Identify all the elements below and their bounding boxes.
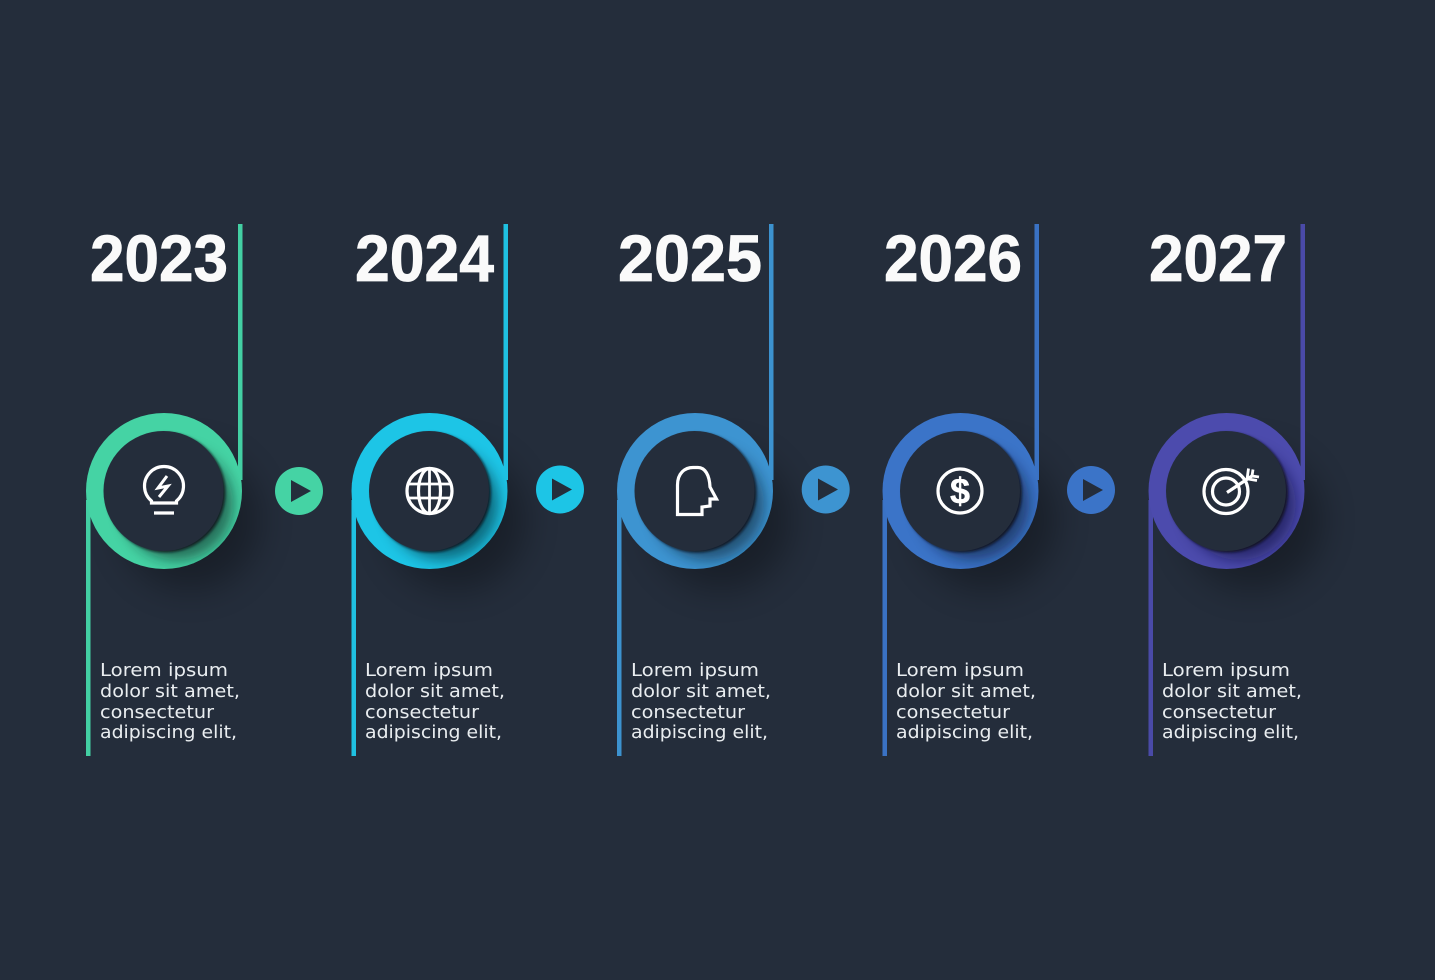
icon: head profile [678, 468, 716, 514]
disc [634, 431, 754, 551]
arrow 1 [275, 467, 323, 515]
text block: Lorem ipsum [365, 660, 493, 681]
text block: Lorem ipsum [896, 660, 1024, 681]
disc [369, 431, 489, 551]
icon: globe [407, 468, 452, 514]
icon: dollar coin [938, 469, 982, 513]
text block: Lorem ipsum [631, 660, 759, 681]
panel: 2025 [617, 221, 791, 756]
icon: dollar coin: $ [950, 470, 970, 512]
arrow 4 [1067, 466, 1115, 514]
text block: adipiscing elit, [100, 722, 237, 743]
text block: consectetur [365, 702, 480, 723]
text block: Lorem ipsum [100, 660, 228, 681]
ring [1148, 413, 1304, 569]
ring [352, 413, 508, 569]
text block [896, 660, 1036, 743]
text block: dolor sit amet, [1162, 681, 1302, 702]
text block [365, 660, 505, 743]
disc [900, 431, 1020, 551]
year 2027: 2027 [1149, 221, 1287, 295]
text block: adipiscing elit, [896, 722, 1033, 743]
text block: consectetur [631, 702, 746, 723]
ring [86, 413, 242, 569]
text block [631, 660, 771, 743]
text block: dolor sit amet, [631, 681, 771, 702]
text block: adipiscing elit, [365, 722, 502, 743]
text block: dolor sit amet, [100, 681, 240, 702]
arrow 3 [802, 466, 850, 514]
panel: 2023 [86, 221, 260, 756]
text block: consectetur [100, 702, 215, 723]
disc [104, 431, 224, 551]
ring [617, 413, 773, 569]
icon: light bulb [144, 467, 184, 513]
icon: target with arrow [1204, 468, 1259, 514]
year 2024: 2024 [355, 221, 494, 295]
text block: adipiscing elit, [1162, 722, 1299, 743]
text block: consectetur [896, 702, 1011, 723]
text block [1162, 660, 1302, 743]
year 2026: 2026 [884, 221, 1022, 295]
text block: consectetur [1162, 702, 1277, 723]
panel: 2026 [882, 221, 1056, 756]
text block [100, 660, 240, 743]
arrow 2 [536, 466, 584, 514]
text block: dolor sit amet, [365, 681, 505, 702]
panel: 2027 [1148, 221, 1322, 756]
disc [1166, 431, 1286, 551]
ring [882, 413, 1038, 569]
text block: dolor sit amet, [896, 681, 1036, 702]
text block: Lorem ipsum [1162, 660, 1290, 681]
text block: adipiscing elit, [631, 722, 768, 743]
panel: 2024 [352, 221, 526, 756]
year 2025: 2025 [618, 221, 762, 295]
year 2023: 2023 [90, 221, 228, 295]
